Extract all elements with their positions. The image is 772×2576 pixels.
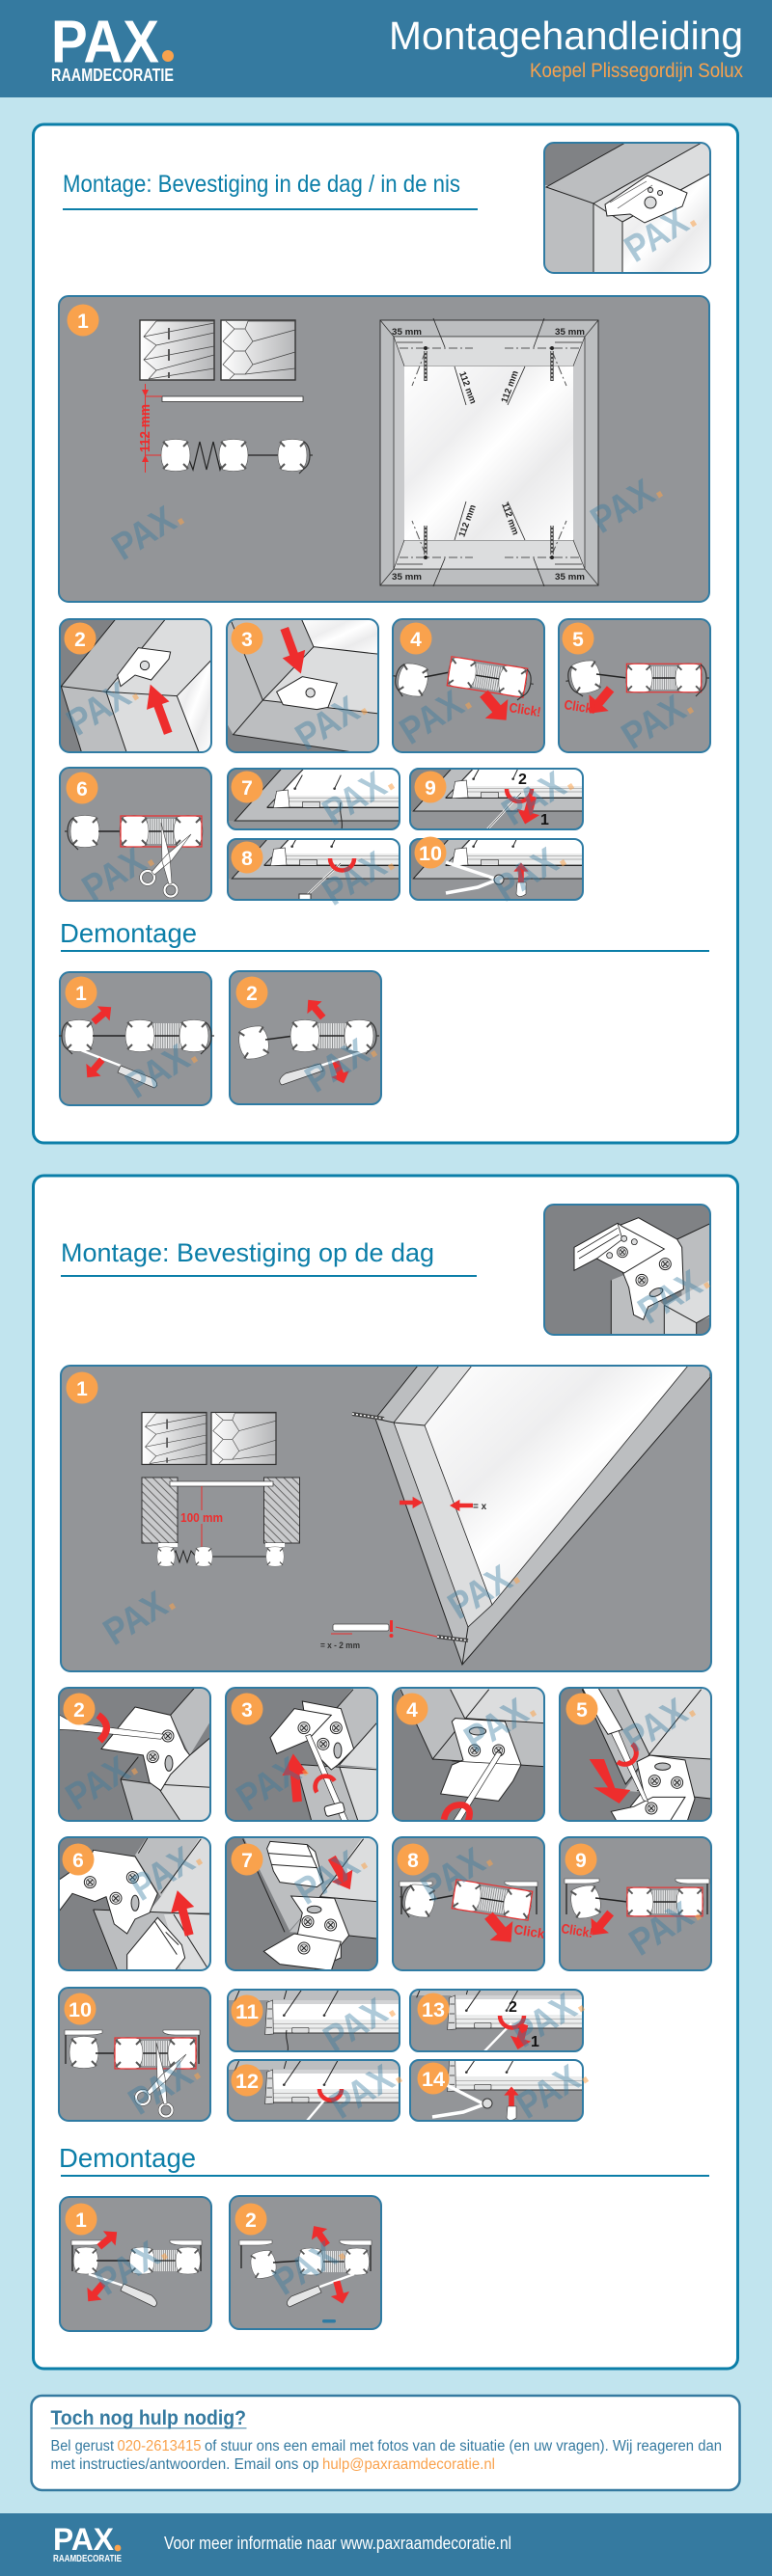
window with drilling positions: [380, 318, 598, 586]
panel: demontage 1: PAX.: [89, 2229, 175, 2304]
panel: step 4: [393, 1686, 547, 1823]
help text: of stuur ons een email met fotos van de situatie (en uw vragen). Wij reageren dan: [205, 2438, 722, 2454]
panel: step 14: [409, 2059, 589, 2122]
panel: step 1 measuring: PAX.: [105, 494, 191, 569]
thumbnail: bracket in de dag: PAX.: [618, 196, 703, 271]
panel: step 10: PAX.: [122, 2048, 207, 2124]
help text: Bel gerust: [50, 2438, 115, 2454]
panel: step 5: PAX.: [615, 683, 701, 758]
badge 3: [232, 1694, 262, 1724]
badge 2: [235, 976, 268, 1009]
panel: step 8: Click: [513, 1921, 546, 1941]
badge 2: [235, 2203, 266, 2236]
panel: step 9: PAX.: [622, 1889, 708, 1965]
badge 9: [415, 772, 446, 802]
badge 5: 5: [572, 629, 584, 651]
badge 5: [562, 623, 594, 654]
panel: step 9: Click!: [561, 1920, 594, 1940]
panel: step 1 measuring: [59, 296, 709, 602]
badge 4: [396, 1694, 428, 1724]
panel: step 7: PAX.: [289, 1838, 374, 1913]
panel: step 6: [60, 768, 211, 910]
panel: step 9: PAX.: [495, 759, 581, 834]
panel: step 9: 1: [540, 812, 549, 828]
panel: demontage 1: PAX.: [119, 1032, 205, 1107]
badge 4: 4: [406, 1699, 418, 1722]
heading: montage in de dag: Montage: Bevestiging in de dag / in de nis: [63, 171, 460, 198]
panel: step 9: 2: [518, 772, 527, 788]
badge 1: 1: [76, 1378, 88, 1400]
panel: step 7: [227, 768, 400, 830]
badge 9: 9: [575, 1850, 587, 1872]
badge 11: [232, 1994, 262, 2027]
badge 3: [232, 623, 262, 654]
badge 7: [232, 772, 262, 802]
thumbnail: bracket in de dag: [544, 143, 710, 273]
panel: step 1 measuring: PAX.: [96, 1579, 182, 1654]
panel: step 6: PAX.: [75, 835, 161, 910]
panel: demontage 2: [230, 971, 384, 1104]
badge 1: [66, 976, 96, 1009]
window with drilling positions: 112 mm: [500, 369, 521, 404]
help text: [50, 2438, 722, 2473]
badge 1: [66, 2203, 96, 2236]
help title: Toch nog hulp nodig?: [50, 2407, 246, 2429]
badge 10: [415, 837, 446, 868]
badge 2: 2: [246, 983, 258, 1005]
window in perspective with drill: = x: [473, 1502, 487, 1512]
heading: demontage: Demontage: [59, 2143, 196, 2173]
panel: step 7: PAX.: [316, 759, 401, 834]
badge 2: 2: [73, 1699, 85, 1722]
panel: step 4: Click!: [509, 699, 542, 719]
rail and mechanism with 112 mm dimension: 112 mm: [137, 404, 153, 452]
thumbnail: bracket op de dag: PAX.: [631, 1258, 717, 1333]
badge 1: 1: [77, 311, 89, 333]
badge 6: 6: [76, 778, 88, 800]
window in perspective with drill: [320, 1366, 710, 1665]
panel: step 4: PAX.: [393, 678, 479, 753]
panel: step 13: [409, 1989, 585, 2052]
badge 10: 10: [419, 843, 442, 865]
badge 7: [232, 1844, 262, 1875]
panel: demontage 2: [230, 2196, 381, 2329]
panel: step 2: PAX.: [59, 1744, 145, 1819]
badge 9: [565, 1844, 596, 1875]
footer logo: PAX: [53, 2522, 115, 2557]
logo: PAX raamdecoratie: PAX: [51, 10, 159, 75]
panel: step 5: Click!: [564, 696, 597, 717]
window with drilling positions: 112 mm: [456, 370, 478, 405]
panel: step 3: PAX.: [289, 684, 374, 759]
window with drilling positions: 35 mm: [555, 327, 585, 338]
badge 13: 13: [422, 1999, 445, 2021]
panel: help box: [31, 2396, 739, 2490]
window in perspective with drill: = x - 2 mm: [320, 1641, 360, 1650]
badge 3: 3: [241, 1699, 253, 1722]
badge 8: 8: [241, 848, 253, 870]
panel: step 10: [409, 837, 584, 902]
pleat details: [140, 320, 295, 380]
panel: step 2: [58, 617, 212, 754]
panel: step 9: [560, 1837, 711, 1970]
panel: step 6: PAX.: [124, 1834, 209, 1910]
rail and mechanism with 112 mm dimension: [137, 384, 313, 474]
footer bar: [0, 2513, 772, 2576]
help text: 020-2613415: [118, 2438, 201, 2454]
panel: montage op de dag: [33, 1176, 737, 2369]
badge 10: [64, 1993, 96, 2025]
badge 8: [398, 1844, 428, 1875]
panel: step 10: PAX.: [487, 835, 573, 910]
panel: step 11: PAX.: [317, 1986, 402, 2061]
panel: demontage 1: [59, 972, 214, 1107]
badge 2: 2: [74, 629, 86, 651]
badge 1: 1: [75, 983, 87, 1005]
badge 1: [66, 1371, 98, 1404]
window with drilling positions: 112 mm: [457, 503, 479, 538]
badge 12: [232, 2064, 262, 2097]
panel: step 4: [390, 619, 544, 753]
panel: step 13: 2: [509, 1999, 517, 2016]
panel: demontage 2: PAX.: [298, 1026, 384, 1101]
panel: step 1 measuring: [61, 1366, 711, 1671]
panel: step 2: PAX.: [60, 669, 146, 745]
panel: step 1 measuring: PAX.: [584, 467, 670, 542]
help text: met instructies/antwoorden. Email ons op: [50, 2456, 318, 2473]
badge 6: 6: [72, 1850, 84, 1872]
panel: step 2: [58, 1688, 212, 1823]
badge 6: [62, 1844, 95, 1875]
panel: step 12: PAX.: [323, 2052, 409, 2128]
panel: step 5: [559, 619, 710, 758]
title: Montagehandleiding: [389, 14, 743, 58]
badge 1: [68, 305, 98, 336]
badge 8: [232, 841, 262, 874]
badge 2: [64, 1694, 95, 1724]
help text: hulp@paxraamdecoratie.nl: [322, 2456, 495, 2473]
window with drilling positions: 35 mm: [392, 327, 422, 338]
subtitle: Koepel Plissegordijn Solux: [530, 60, 743, 82]
footer text: Voor meer informatie naar www.paxraamdecoratie.nl: [164, 2534, 511, 2553]
panel: step 7: [225, 1835, 379, 1972]
panel: step 8: [393, 1835, 546, 1970]
badge 11: 11: [235, 2001, 259, 2023]
badge 14: [417, 2062, 450, 2095]
panel: step 5: [558, 1686, 714, 1823]
panel: demontage 2: PAX.: [266, 2229, 352, 2304]
pleat details: [142, 1412, 276, 1464]
header bar: [0, 0, 772, 97]
logo: PAX raamdecoratie: RAAMDECORATIE: [51, 66, 174, 85]
panel: step 13: 1: [531, 2034, 539, 2050]
panel: step 12: [227, 2059, 402, 2122]
panel: step 4: PAX.: [457, 1686, 543, 1761]
panel: step 3: [225, 1688, 379, 1823]
badge 5: [565, 1694, 598, 1724]
panel: demontage 1: [60, 2197, 211, 2331]
panel: step 14: PAX.: [510, 2052, 595, 2128]
panel: step 11: [227, 1989, 400, 2052]
badge 4: [400, 623, 432, 654]
panel: step 3: PAX.: [230, 1745, 316, 1820]
panel: step 5: PAX.: [617, 1686, 703, 1761]
badge 10: 10: [69, 1999, 92, 2021]
badge 12: 12: [235, 2071, 259, 2093]
heading: demontage: Demontage: [60, 918, 197, 948]
wall section with 100 mm dimension: [142, 1478, 299, 1566]
badge 8: 8: [407, 1850, 419, 1872]
panel: step 13: PAX.: [506, 1981, 592, 2056]
window with drilling positions: 112 mm: [499, 502, 520, 536]
panel: step 8: PAX.: [414, 1835, 500, 1911]
badge 13: [417, 1993, 450, 2025]
panel: step 10: [59, 1988, 210, 2124]
badge 2: 2: [245, 2210, 257, 2232]
panel: step 6: [58, 1834, 212, 1972]
panel: step 8: [227, 838, 400, 906]
badge 9: 9: [425, 777, 436, 800]
badge 7: 7: [241, 1850, 253, 1872]
heading: montage op de dag: Montage: Bevestiging op de dag: [61, 1238, 434, 1267]
panel: montage in de dag: [33, 124, 737, 1143]
badge 4: 4: [410, 629, 422, 651]
wall section with 100 mm dimension: 100 mm: [180, 1510, 223, 1525]
badge 14: 14: [422, 2069, 445, 2091]
window with drilling positions: 35 mm: [555, 572, 585, 583]
badge 3: 3: [241, 629, 253, 651]
window with drilling positions: 35 mm: [392, 572, 422, 583]
badge 7: 7: [241, 777, 253, 800]
badge 6: [66, 772, 98, 804]
panel: step 9: [409, 768, 584, 830]
thumbnail: bracket op de dag: [543, 1204, 717, 1336]
panel: step 8: PAX.: [316, 839, 401, 914]
panel: step 1 measuring: PAX.: [441, 1553, 527, 1628]
badge 1: 1: [75, 2210, 87, 2232]
badge 2: [64, 623, 96, 654]
panel: step 3: [225, 617, 379, 759]
badge 5: 5: [576, 1699, 588, 1722]
footer logo: RAAMDECORATIE: [53, 2554, 122, 2564]
